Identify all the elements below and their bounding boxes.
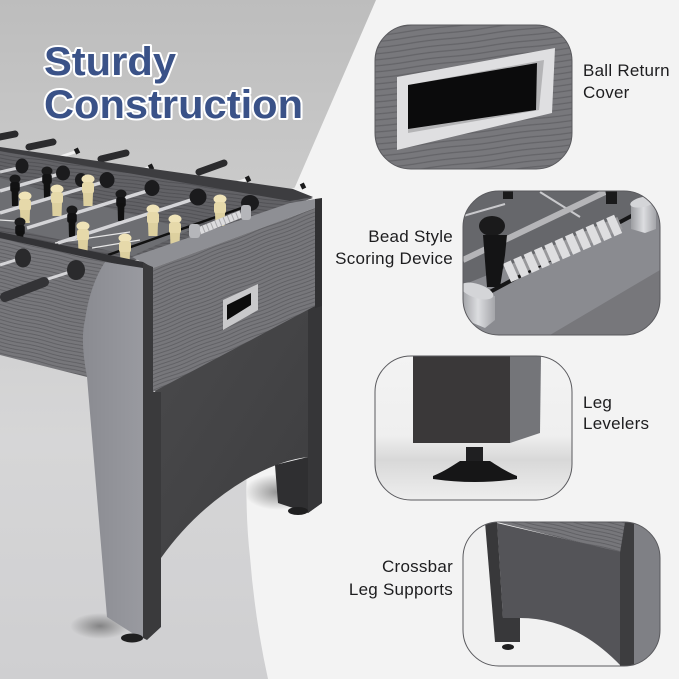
- end wood panel: [153, 208, 315, 392]
- playfield surface: [0, 178, 190, 256]
- bead scoring device: [189, 205, 251, 238]
- leg feet: [121, 507, 308, 642]
- corner dark edge: [143, 263, 161, 640]
- row: black players two: [0, 166, 70, 206]
- row: front rod with cream players: [108, 194, 259, 265]
- panel: bead scoring device: [459, 190, 660, 335]
- right leg: [275, 450, 322, 513]
- label: bead scoring device: Scoring Device: [335, 249, 453, 268]
- panel: leg levelers: [375, 356, 572, 500]
- panel: ball return cover: [375, 25, 572, 169]
- ball return on table: [223, 284, 258, 330]
- row: cream players three: [0, 172, 114, 223]
- crossbar support: [153, 298, 315, 558]
- label: ball return cover: Cover: [583, 83, 630, 102]
- near side wood panel: [0, 236, 143, 377]
- playing field back wall: [0, 148, 313, 262]
- label: crossbar leg supports: Crossbar: [382, 557, 453, 576]
- row: black players three: [14, 180, 160, 249]
- end panel top: [132, 199, 315, 268]
- row: far rod: [0, 158, 28, 174]
- foosball table: [0, 134, 322, 642]
- label: bead scoring device: Bead Style: [368, 227, 453, 246]
- grey marble backdrop band: [0, 0, 376, 679]
- label: crossbar leg supports: Leg Supports: [349, 580, 453, 599]
- row: cream players two: [58, 188, 206, 253]
- label: ball return cover: Ball Return: [583, 61, 670, 80]
- playfield markings: [0, 220, 140, 248]
- near side handles: [0, 248, 85, 297]
- title line 2: Construction: [44, 83, 303, 127]
- floor shadows: [73, 476, 290, 638]
- title line 1: Sturdy: [44, 40, 177, 84]
- panel: crossbar leg supports: [463, 522, 660, 666]
- end panel right edge: [315, 198, 322, 308]
- label: leg levelers: Levelers: [583, 414, 649, 433]
- grey corner leg: [83, 262, 143, 640]
- back rim: [0, 147, 313, 201]
- label: leg levelers: Leg: [583, 393, 612, 412]
- title: [44, 40, 303, 127]
- near side rim: [0, 232, 153, 270]
- back handles and rod ends: [0, 134, 305, 191]
- right leg post: [308, 235, 322, 513]
